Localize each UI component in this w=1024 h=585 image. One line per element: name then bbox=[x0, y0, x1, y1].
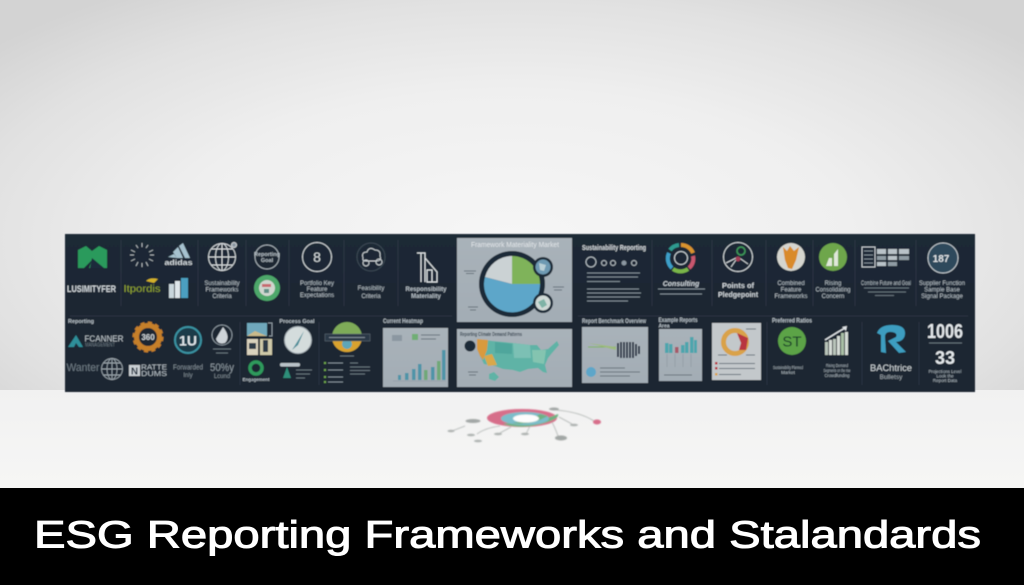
heading: current heatmap: Current Heatmap bbox=[383, 319, 423, 325]
logo text: LUSIMITYFER bbox=[67, 284, 116, 295]
text: growth caption: Rising Demand bbox=[826, 363, 848, 368]
panel: US map bbox=[457, 329, 572, 387]
brand: N Ratte Dums: N bbox=[131, 366, 138, 378]
text: consulting bbox=[658, 281, 705, 294]
icon: network circle bbox=[724, 242, 752, 272]
icon: teal circle bbox=[175, 327, 201, 353]
text: pledges: Pledgepoint bbox=[718, 292, 759, 299]
heading: preferred ratios: Preferred Ratios bbox=[772, 318, 813, 324]
thumbnails bbox=[247, 323, 272, 355]
stat caption: Report Data bbox=[933, 378, 958, 383]
text: ST caption: Market bbox=[781, 370, 796, 375]
brand: N Ratte Dums bbox=[129, 364, 167, 378]
icon: ST badge bbox=[778, 327, 806, 355]
heading: process goal: Process Goal bbox=[279, 319, 315, 325]
text: consumers bbox=[816, 281, 850, 300]
text: feasibility: Criteria bbox=[361, 294, 381, 300]
icon: color ring bbox=[668, 245, 693, 271]
icon: orange badge bbox=[777, 243, 805, 271]
icon: teal circle: 1U bbox=[179, 332, 197, 348]
text: consumers: Consolidating bbox=[816, 288, 850, 294]
text: supplier: Supplier Function bbox=[919, 281, 965, 287]
text: frameworks criteria bbox=[204, 281, 240, 300]
text: consumers: Concern bbox=[822, 294, 844, 300]
icon: green logo bbox=[78, 246, 107, 268]
icon: globe bbox=[208, 242, 236, 271]
text: ST caption: Sustainability Planned bbox=[773, 365, 803, 370]
text: forwarded bbox=[173, 364, 203, 379]
brand text bbox=[124, 278, 160, 295]
stat: 1006: 1006 bbox=[927, 321, 963, 343]
icon: growth chart bbox=[825, 326, 848, 355]
text: ST caption bbox=[773, 365, 803, 375]
text: protocol frameworks: Combined bbox=[777, 281, 805, 287]
icon: small globe bbox=[102, 358, 122, 380]
icon: bars bbox=[169, 278, 188, 298]
text: 50% bbox=[210, 362, 234, 380]
text: combined figures bbox=[861, 281, 911, 296]
text: protocol frameworks: Frameworks bbox=[774, 294, 808, 300]
text: expectations: Expectations bbox=[300, 293, 334, 299]
text: growth caption: Segments on the rise bbox=[824, 368, 851, 373]
legend bbox=[324, 362, 370, 383]
icon: orange gear: 360 bbox=[141, 333, 155, 342]
panel: bar chart bbox=[383, 328, 448, 387]
icon: flame circle bbox=[212, 325, 232, 353]
text: consumers: Rising bbox=[825, 281, 841, 287]
text: materiality: Responsibility bbox=[405, 287, 447, 293]
icon: green circle bbox=[254, 275, 280, 301]
icon: green swirl: Engagement bbox=[242, 377, 270, 382]
icon: striped brand bbox=[164, 243, 192, 267]
icon: striped brand: adidas bbox=[164, 258, 192, 267]
icon: teal triangle with name: FCANNER bbox=[84, 334, 124, 344]
text: supplier: Sample Base bbox=[924, 288, 961, 294]
panel: US map: Reporting Climate Demand Patterns bbox=[460, 332, 522, 338]
icon: building bbox=[417, 253, 437, 282]
text: combined figures: Combine Future and Goal bbox=[861, 281, 911, 287]
text: consulting: Consulting bbox=[663, 281, 700, 288]
icon: badge: Goal bbox=[261, 258, 274, 264]
heading: benchmark overview: Report Benchmark Overview bbox=[582, 318, 647, 325]
text: materiality bbox=[405, 287, 447, 300]
text: expectations: Portfolio Key bbox=[300, 281, 334, 287]
stat caption bbox=[928, 369, 962, 383]
panel: donut report bbox=[712, 323, 761, 380]
text: forwarded: Forwarded bbox=[173, 364, 203, 372]
icon: green swirl bbox=[242, 362, 270, 382]
brand text: Itpordis bbox=[124, 284, 160, 295]
stat caption: Projections Level bbox=[928, 369, 962, 374]
icon: green chart badge bbox=[819, 243, 847, 271]
text: BAChtrice: BAChtrice bbox=[870, 363, 912, 373]
icon: outlined circle bbox=[302, 242, 332, 272]
text: BAChtrice bbox=[870, 363, 912, 381]
icon: cloud bbox=[357, 243, 385, 271]
icon: number badge bbox=[928, 243, 958, 273]
icon: ST badge: ST bbox=[782, 334, 802, 350]
brand: N Ratte Dums: DUMS bbox=[141, 371, 167, 378]
icon: teal triangle with name: MANAGEMENT bbox=[85, 342, 115, 348]
text: frameworks criteria: Sustainability bbox=[204, 281, 240, 287]
panel: pie chart bbox=[457, 238, 572, 322]
panel: teal bars bbox=[659, 329, 702, 381]
floor bbox=[0, 390, 1024, 488]
text: expectations bbox=[300, 281, 334, 299]
heading: example reports: Area bbox=[658, 324, 670, 330]
stat caption: Look the bbox=[936, 374, 954, 378]
text block: sustainability reporting: Sustainability Reporting bbox=[582, 243, 646, 252]
icon: earth logo bbox=[325, 322, 370, 356]
dark dashboard panel bbox=[65, 234, 975, 392]
heading: reporting: Reporting bbox=[68, 319, 94, 325]
text block: sustainability reporting bbox=[582, 243, 646, 301]
text: pledges: Points of bbox=[722, 281, 755, 290]
icon: teal triangle with name bbox=[68, 334, 124, 348]
heading: example reports: Example Reports bbox=[658, 318, 698, 324]
icon: number badge: 187 bbox=[933, 254, 950, 265]
text: supplier bbox=[919, 281, 965, 300]
icon: sunburst bbox=[130, 243, 154, 267]
text: 50%: Lcund bbox=[214, 374, 230, 380]
title band bbox=[0, 488, 1024, 585]
background wall bbox=[0, 0, 1024, 391]
text: frameworks criteria: Frameworks bbox=[205, 288, 239, 294]
icon: table bbox=[862, 247, 909, 267]
text: frameworks criteria: Criteria bbox=[212, 294, 232, 300]
icon: bar with tree and lines bbox=[280, 363, 312, 378]
panel: pie chart: Framework Materiality Market bbox=[471, 242, 559, 249]
text: BAChtrice: Bulletsy bbox=[880, 374, 903, 381]
text: supplier: Signal Package bbox=[921, 294, 964, 300]
floor diagram bbox=[448, 408, 601, 442]
text: feasibility: Feasibility bbox=[358, 286, 384, 292]
icon: teal R bbox=[877, 325, 906, 353]
text: feasibility bbox=[358, 286, 384, 300]
text: expectations: Feature bbox=[307, 287, 328, 293]
icon: outlined circle: 8 bbox=[313, 249, 321, 265]
text: forwarded: Inly bbox=[183, 373, 193, 379]
icon: orange gear bbox=[134, 323, 162, 351]
text: protocol frameworks bbox=[774, 281, 808, 300]
icon: badge: Reporting bbox=[254, 252, 280, 258]
text: wanter: Wanter bbox=[66, 362, 100, 374]
text: growth caption bbox=[824, 363, 851, 378]
text: 50%: 50%y bbox=[210, 362, 234, 374]
text: protocol frameworks: Feature bbox=[781, 288, 802, 294]
icon: compass bbox=[284, 326, 312, 354]
brand: N Ratte Dums: RATTE bbox=[141, 364, 167, 372]
stat: 33: 33 bbox=[935, 348, 955, 368]
text: growth caption: Crowdfunding bbox=[824, 373, 850, 378]
title: ESG Reporting Frameworks and Stalandards bbox=[34, 514, 981, 556]
text: pledges bbox=[718, 281, 759, 299]
panel: benchmark chart bbox=[582, 327, 648, 383]
text: materiality: Materiality bbox=[411, 294, 441, 300]
icon: badge bbox=[254, 245, 280, 269]
heading: example reports bbox=[658, 318, 698, 330]
